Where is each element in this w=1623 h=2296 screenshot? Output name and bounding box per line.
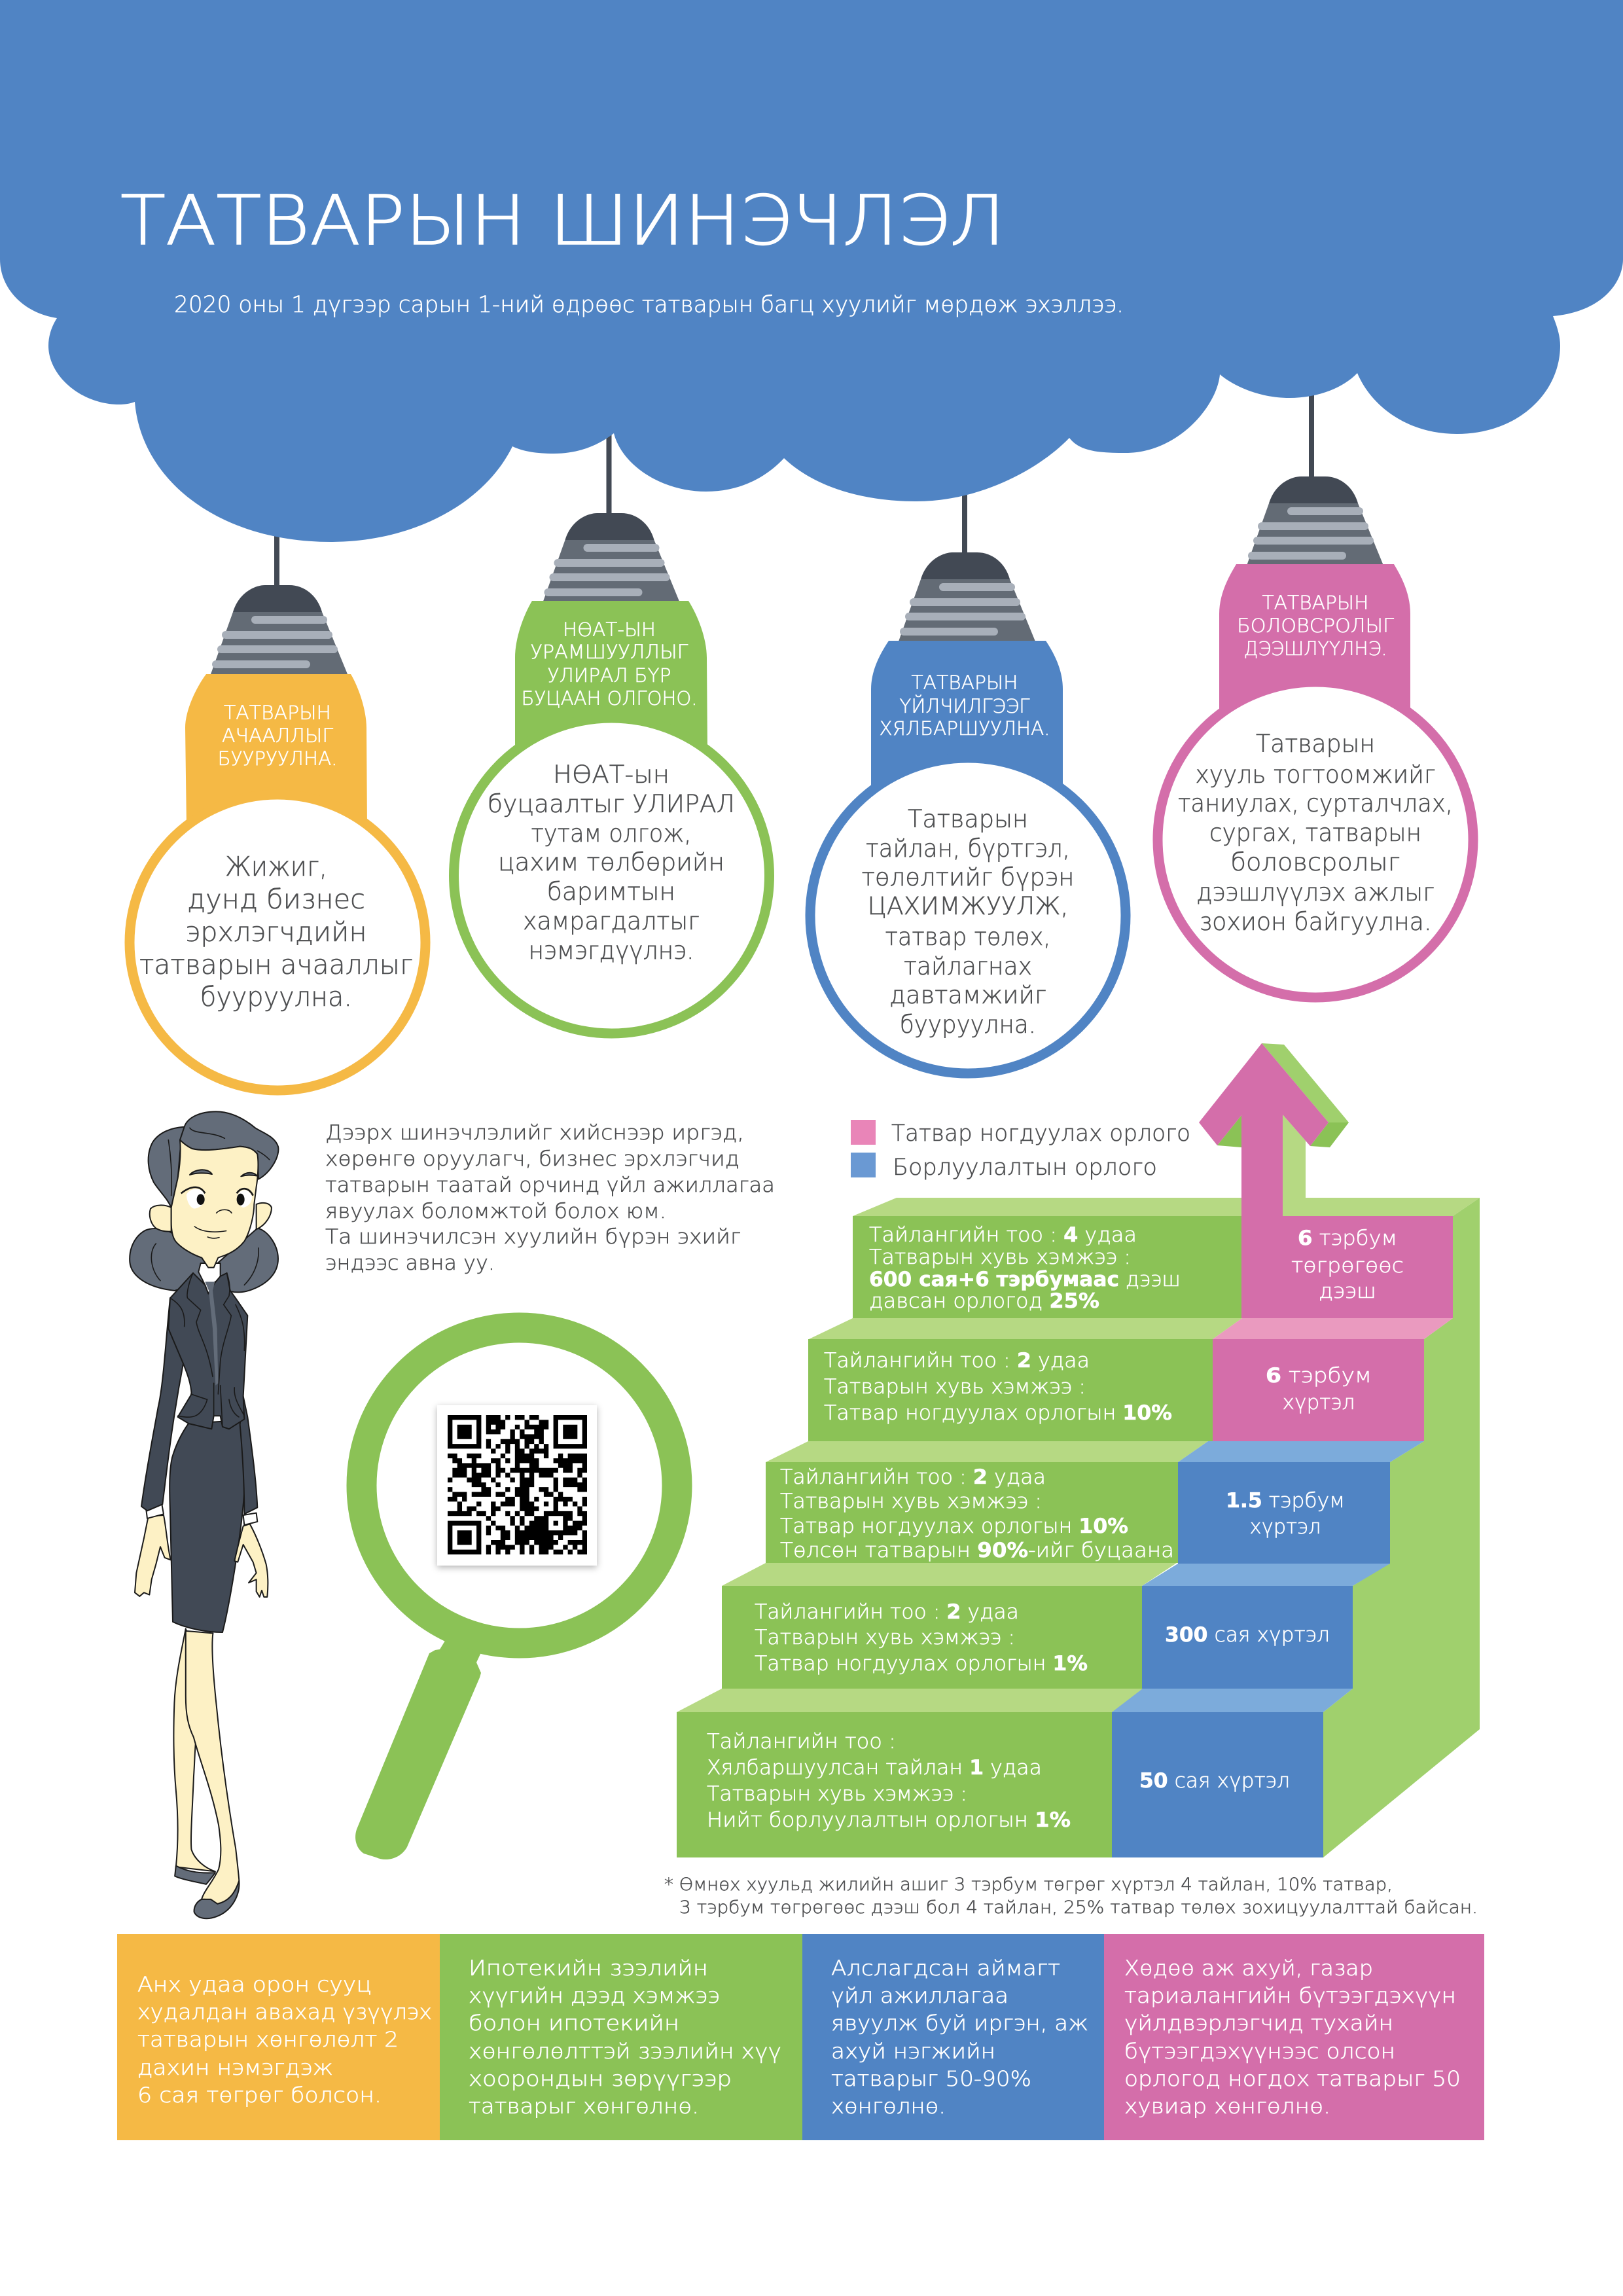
step 3: Татварын хувь хэмжээ :: [780, 1490, 1042, 1513]
footnote: 3 тэрбум төгрөгөөс дээш бол 4 тайлан, 25% татвар төлөх зохицуулалттай байсан.: [679, 1897, 1478, 1918]
panel: mortgage relief: Ипотекийн зээлийн: [469, 1956, 708, 1981]
magnifier: [355, 1327, 677, 1859]
paragraph: Дээрх шинэчлэлийг хийснээр иргэд,: [325, 1121, 744, 1145]
bulb 4 body text: Татварын: [1256, 730, 1375, 758]
bulb 2 heading: БУЦААН ОЛГОНО.: [521, 687, 698, 709]
bulb 3 heading: ХЯЛБАРШУУЛНА.: [880, 717, 1050, 740]
step 2: [722, 1563, 1390, 1689]
bulb 4 heading: [1237, 592, 1394, 660]
bulb 1 cord and socket: [211, 524, 348, 674]
bulb 4 body text: дээшлүүлэх ажлыг: [1196, 878, 1435, 906]
bulb 1 heading: АЧААЛЛЫГ: [222, 725, 333, 747]
paragraph: татварын таатай орчинд үйл ажиллагаа: [325, 1174, 775, 1197]
bulb 2 neck: [515, 601, 707, 749]
arms, hands and jacket: [135, 1263, 268, 1597]
bulb 2 heading: УЛИРАЛ БҮР: [547, 664, 671, 687]
step 3: хүртэл: [1250, 1515, 1321, 1539]
footnote: * Өмнөх хуульд жилийн ашиг 3 тэрбум төгрөг хүртэл 4 тайлан, 10% татвар,: [664, 1874, 1393, 1895]
paragraph: явуулах боломжтой болох юм.: [325, 1200, 666, 1223]
panel: agriculture relief: бүтээгдэхүүнээс олсон: [1124, 2039, 1395, 2064]
step 2: Татварын хувь хэмжээ :: [755, 1626, 1015, 1649]
bulb 1 heading: ТАТВАРЫН: [224, 702, 331, 724]
bulb 1 body text: бууруулна.: [200, 981, 352, 1013]
bulb 4 heading: ТАТВАРЫН: [1262, 592, 1369, 614]
bulb 2 circle: [454, 718, 770, 1033]
step 2: Тайлангийн тоо : 2 удаа: [755, 1600, 1019, 1624]
bulb 1 body text: Жижиг,: [225, 851, 327, 882]
bulb 3 heading: ҮЙЛЧИЛГЭЭГ: [899, 695, 1030, 717]
panel: agriculture relief: орлогод ногдох татварыг 50: [1124, 2066, 1461, 2091]
bulb 1 heading: [217, 702, 338, 770]
panel: remote province relief: татварыг 50-90%: [831, 2066, 1031, 2091]
bulb 1 heading: БУУРУУЛНА.: [217, 747, 338, 770]
panel: mortgage relief: [440, 1934, 802, 2140]
bulb 1 neck: [185, 674, 367, 826]
panel: agriculture relief: хувиар хөнгөлнө.: [1124, 2094, 1330, 2119]
staircase: [677, 1198, 1480, 1857]
step 5: 600 сая+6 тэрбумаас дээш: [869, 1268, 1181, 1291]
bulb 4 circle: [1158, 682, 1473, 997]
step 4: [808, 1318, 1453, 1441]
bulb 3 neck: [871, 641, 1063, 785]
bulb 3 circle: [810, 758, 1126, 1073]
bulb 4 heading: ДЭЭШЛҮҮЛНЭ.: [1243, 637, 1387, 660]
panel: mortgage relief: хөнгөлөлттэй зээлийн хүү: [469, 2039, 781, 2064]
step 3: Татвар ногдуулах орлогын 10%: [780, 1515, 1128, 1538]
bulb 2 body text: буцаалтыг УЛИРАЛ: [488, 790, 735, 818]
panel: mortgage relief: хүүгийн дээд хэмжээ: [469, 1983, 720, 2008]
handle: [355, 1641, 481, 1859]
bulb 3 body text: тайлагнах: [904, 952, 1032, 980]
bulb 2 body text: хамрагдалтыг: [523, 907, 700, 935]
panel: mortgage relief: хоорондын зөрүүгээр: [469, 2066, 732, 2091]
step 5: Тайлангийн тоо : 4 удаа: [869, 1223, 1137, 1247]
panel: mortgage relief: болон ипотекийн: [469, 2011, 679, 2036]
bulb 4 body text: [1178, 730, 1453, 936]
step 5: 6 тэрбум: [1298, 1227, 1397, 1250]
bulb 2 body text: цахим төлбөрийн: [498, 848, 724, 876]
legend label: tax income: Татвар ногдуулах орлого: [891, 1121, 1190, 1147]
panel: agriculture relief: тариалангийн бүтээгдэхүүн: [1124, 1983, 1456, 2008]
panel: housing loan relief: Анх удаа орон сууц: [137, 1972, 372, 1997]
step 3: Төлсөн татварын 90%-ийг буцаана: [780, 1539, 1174, 1562]
panel: housing loan relief: худалдан авахад үзүүлэх: [137, 2000, 432, 2024]
footnote: [664, 1874, 1478, 1918]
head: [149, 1111, 278, 1268]
bulb 2 body text: нэмэгдүүлнэ.: [529, 937, 694, 965]
bulb 2 cord and socket: [543, 425, 679, 602]
bulb 3 heading: ТАТВАРЫН: [911, 672, 1018, 694]
bulb 3 body text: бууруулна.: [900, 1011, 1036, 1039]
bulb 4 body text: таниулах, сурталчлах,: [1178, 789, 1453, 817]
bulb 4 cord and socket: [1247, 369, 1383, 565]
step 1: Тайлангийн тоо :: [707, 1730, 896, 1753]
panel: remote province relief: [802, 1934, 1104, 2140]
bulb 3: blue: [810, 445, 1126, 1073]
bulb 1 circle: [130, 795, 425, 1090]
title: ТАТВАРЫН ШИНЭЧЛЭЛ: [120, 181, 1005, 260]
skirt: [169, 1420, 245, 1632]
legs and shoes: [173, 1628, 239, 1918]
bulb 2 body text: [488, 761, 735, 965]
panel: housing loan relief: [117, 1934, 440, 2140]
lower hair: [130, 1229, 278, 1292]
legend: [851, 1120, 1190, 1181]
lens ring: [361, 1327, 677, 1643]
bulb 3 body text: татвар төлөх,: [885, 923, 1051, 951]
legend label: sales income: Борлуулалтын орлого: [893, 1155, 1157, 1181]
panel: housing loan relief: дахин нэмэгдэж: [137, 2055, 333, 2080]
panel: agriculture relief: үйлдвэрлэгчид тухайн: [1124, 2011, 1393, 2036]
paragraph: хөрөнгө оруулагч, бизнес эрхлэгчид: [325, 1147, 740, 1171]
step 5: Татварын хувь хэмжээ :: [869, 1246, 1131, 1269]
bulb 2 body text: НӨАТ-ын: [553, 761, 669, 789]
step 1: Нийт борлуулалтын орлогын 1%: [707, 1808, 1071, 1832]
bulb 3 body text: төлөлтийг бүрэн: [861, 863, 1075, 891]
step 4: Татварын хувь хэмжээ :: [824, 1375, 1086, 1399]
arrow: [1199, 1043, 1349, 1217]
bulb 1: yellow: [130, 524, 425, 1090]
step 1: [677, 1689, 1353, 1857]
bulb 2 body text: тутам олгож,: [531, 819, 691, 848]
legend swatch: pink: [851, 1120, 876, 1145]
bulb 3 body text: Татварын: [908, 805, 1028, 833]
bulb 3 body text: давтамжийг: [889, 981, 1046, 1009]
QR code: [448, 1418, 587, 1552]
step 5: [853, 1198, 1480, 1318]
bulb 1 body text: эрхлэгчдийн: [186, 916, 366, 948]
panel: agriculture relief: Хөдөө аж ахуй, газар: [1124, 1956, 1373, 1981]
bulb 2 body text: баримтын: [547, 878, 675, 906]
step 5: дээш: [1319, 1280, 1376, 1303]
step 2: 300 сая хүртэл: [1165, 1623, 1330, 1647]
step 4: Татвар ногдуулах орлогын 10%: [824, 1401, 1172, 1425]
paragraph: [325, 1121, 775, 1275]
bulb 4 heading: БОЛОВСРОЛЫГ: [1237, 615, 1394, 637]
bulb 4 body text: хууль тогтоомжийг: [1195, 761, 1436, 789]
cloud: [0, 0, 1623, 542]
panel: agriculture relief: [1104, 1934, 1484, 2140]
character: businesswoman: [130, 1111, 278, 1918]
bulb 4 body text: боловсролыг: [1230, 848, 1400, 876]
panel: remote province relief: үйл ажиллагаа: [831, 1983, 1008, 2008]
step 4: 6 тэрбум: [1266, 1364, 1372, 1388]
step 4: хүртэл: [1283, 1391, 1355, 1414]
panel: remote province relief: хөнгөлнө.: [831, 2094, 946, 2119]
bulb 2: green: [454, 425, 770, 1033]
bulb 4 body text: сургах, татварын: [1209, 819, 1421, 847]
paragraph: Та шинэчилсэн хуулийн бүрэн эхийг: [325, 1225, 741, 1249]
step 1: 50 сая хүртэл: [1139, 1769, 1290, 1793]
panel: housing loan relief: татварын хөнгөлөлт 2: [137, 2027, 399, 2052]
step 1: Татварын хувь хэмжээ :: [707, 1782, 967, 1806]
panel: mortgage relief: татварыг хөнгөлнө.: [469, 2094, 699, 2119]
bulb 3 body text: тайлан, бүртгэл,: [866, 834, 1070, 863]
bulb 3 body text: ЦАХИМЖУУЛЖ,: [868, 892, 1068, 920]
side face: [1323, 1198, 1480, 1857]
bulb 2 heading: НӨАТ-ЫН: [563, 619, 656, 641]
bulb 1 body text: татварын ачааллыг: [139, 949, 413, 980]
panel: housing loan relief: 6 сая төгрөг болсон.: [137, 2083, 382, 2108]
bulb 4: pink: [1158, 369, 1473, 997]
step 5: давсан орлогод 25%: [869, 1289, 1099, 1313]
step 3: 1.5 тэрбум: [1226, 1489, 1345, 1513]
bulb 3 body text: [861, 805, 1075, 1039]
bulb 2 heading: УРАМШУУЛЛЫГ: [530, 641, 688, 663]
subtitle: 2020 оны 1 дүгээр сарын 1-ний өдрөөс татварын багц хуулийг мөрдөж эхэллээ.: [174, 292, 1124, 318]
step 5: төгрөгөөс: [1291, 1254, 1404, 1278]
bulb 4 body text: зохион байгуулна.: [1199, 908, 1432, 936]
step 2: Татвар ногдуулах орлогын 1%: [755, 1652, 1088, 1676]
QR code card: [437, 1405, 597, 1566]
bulb 4 neck: [1219, 564, 1410, 710]
bulb 1 body text: дунд бизнес: [187, 884, 365, 915]
bulb 2 heading: [521, 619, 698, 709]
panel: remote province relief: Алслагдсан аймагт: [831, 1956, 1060, 1981]
step 3: Тайлангийн тоо : 2 удаа: [780, 1465, 1046, 1489]
panel: remote province relief: явуулж буй иргэн, аж: [831, 2011, 1088, 2036]
step 4: Тайлангийн тоо : 2 удаа: [824, 1349, 1090, 1372]
bulb 1 body text: [139, 851, 413, 1013]
legend swatch: blue: [851, 1153, 876, 1177]
panel: remote province relief: ахуй нэгжийн: [831, 2039, 995, 2064]
bulb 3 cord and socket: [899, 445, 1035, 641]
paragraph: эндээс авна уу.: [325, 1251, 495, 1275]
step 3: [766, 1441, 1424, 1564]
bulb 3 heading: [880, 672, 1050, 740]
step 1: Хялбаршуулсан тайлан 1 удаа: [707, 1756, 1042, 1780]
